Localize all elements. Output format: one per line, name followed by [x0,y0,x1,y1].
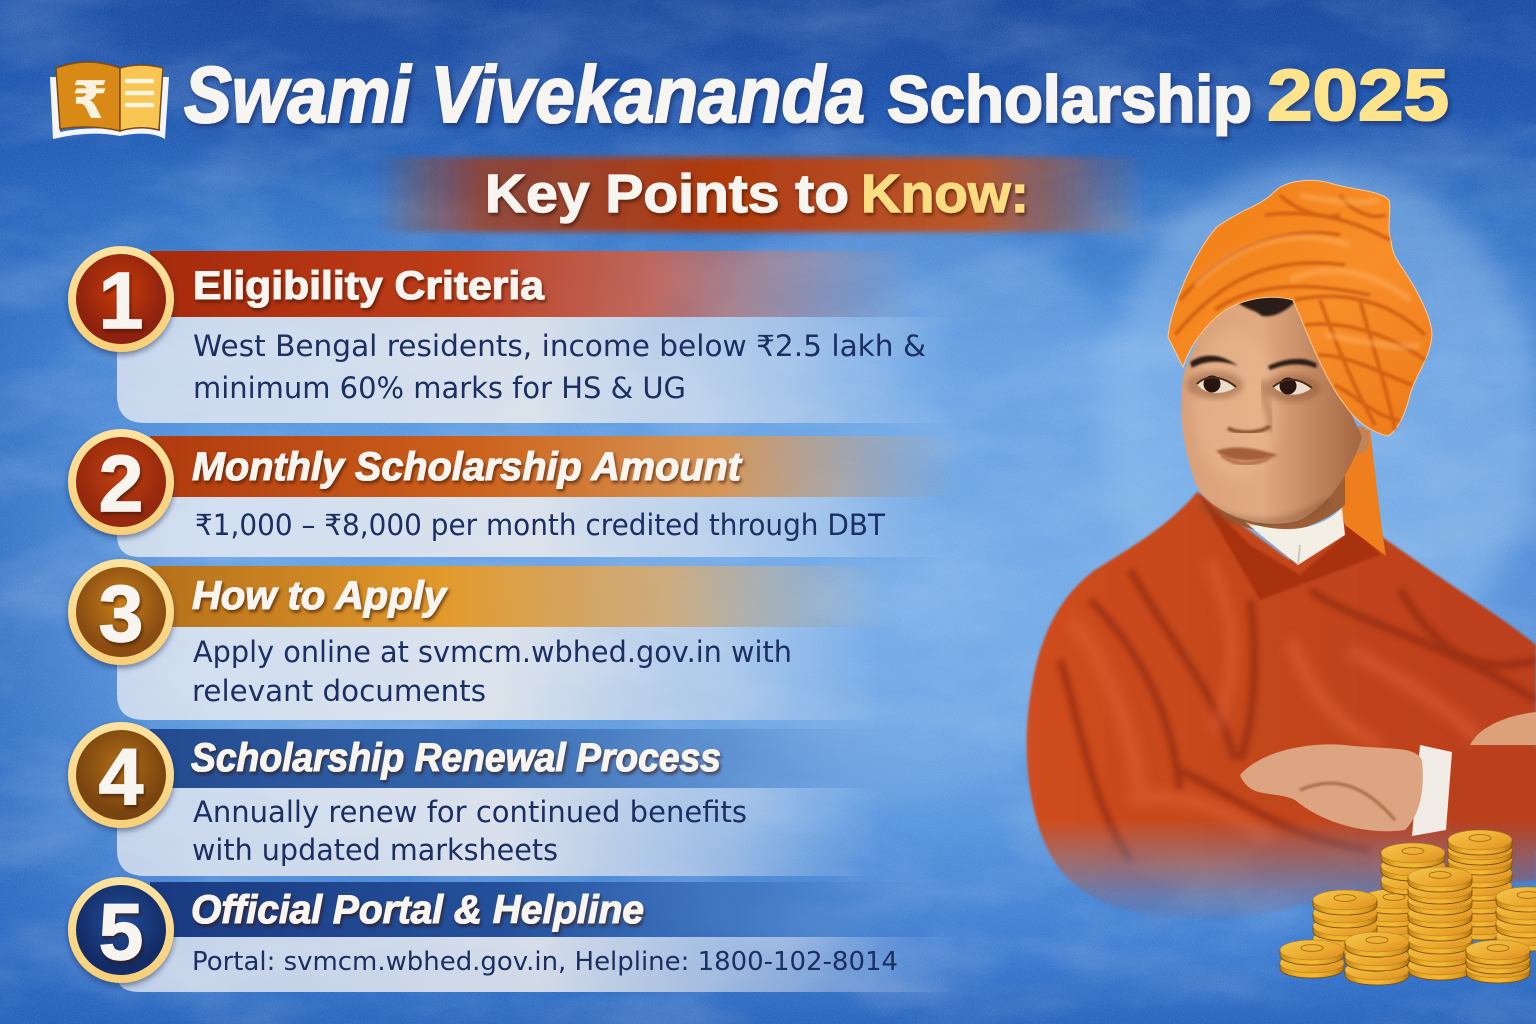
subtitle banner: Key Points to Know [375,157,1145,232]
panel: how to apply: 3 [99,569,143,658]
panel: monthly scholarship amount: ₹1,000 – ₹8,000 per month credited through DBT [195,508,885,542]
panel: scholarship renewal process [68,722,920,876]
panel: how to apply: Apply online at svmcm.wbhed.gov.in with [193,635,792,669]
panel: eligibility criteria: West Bengal residents, income below ₹2.5 lakh & [193,329,926,363]
panel: how to apply: relevant documents [192,674,486,708]
title: Swami Vivekananda [184,50,865,139]
panel: scholarship renewal process: with updated marksheets [192,833,558,867]
subtitle banner: Key Points to Know: Key Points to [485,164,849,224]
hair [1238,291,1294,316]
portrait: Swami Vivekananda [1027,180,1536,920]
subtitle banner: Key Points to Know: Know: [861,164,1029,224]
icon: open book with rupee sign [50,62,169,139]
panel: scholarship renewal process: Annually renew for continued benefits [193,795,747,829]
turban [1168,180,1432,436]
panel: official portal and helpline [68,877,960,992]
title: 2025 [1267,56,1449,136]
mouth [1216,447,1278,461]
collar [1245,508,1345,565]
icon: stacks of gold coins [1280,830,1536,985]
turban folds [1175,195,1425,430]
title: Scholarship [887,62,1252,136]
panel: eligibility criteria: minimum 60% marks for HS & UG [193,371,686,405]
ear [1351,426,1369,454]
panel: official portal and helpline: 5 [99,887,143,976]
robe and arms [1027,492,1536,920]
panel: monthly scholarship amount: Monthly Scholarship Amount [192,445,743,489]
panel: eligibility criteria: 1 [99,256,143,345]
neck [1205,465,1345,532]
panel: scholarship renewal process: Scholarship Renewal Process [191,736,721,780]
panel: official portal and helpline: Official Portal & Helpline [191,888,644,932]
panel: how to apply [68,559,890,720]
turban tail [1341,430,1386,556]
panel: monthly scholarship amount: 2 [99,439,143,528]
eyebrows [1190,356,1238,368]
face [1181,296,1362,524]
hand and cuff [1412,745,1452,836]
panel: eligibility criteria: Eligibility Criteria [193,264,545,308]
nose [1228,426,1270,432]
panel: how to apply: How to Apply [192,574,448,618]
icon: open book with rupee sign: ₹ [72,72,108,130]
panel: official portal and helpline: Portal: svmcm.wbhed.gov.in, Helpline: 1800-102-8014 [192,947,898,977]
panel: monthly scholarship amount [68,429,965,557]
panel: eligibility criteria [68,246,955,423]
title [184,50,1449,139]
eyes [1197,378,1236,393]
panel: scholarship renewal process: 4 [99,732,144,821]
